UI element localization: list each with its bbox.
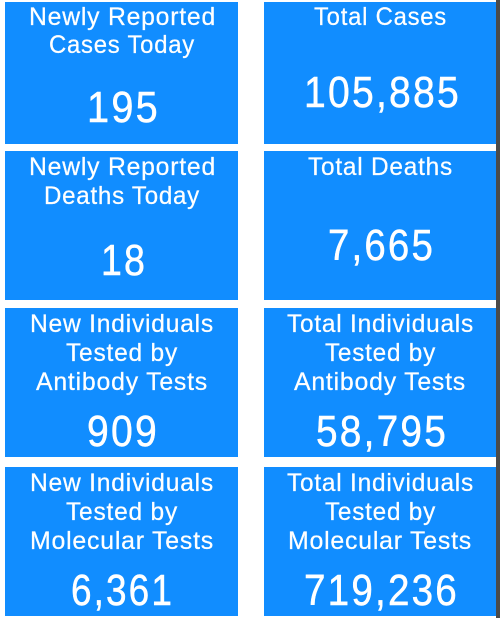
panel: total individuals tested by molecular tests [264,467,496,616]
panel: total deaths: Total Deaths [308,153,453,181]
panel: newly reported cases today: Newly Reported [29,3,216,31]
panel: newly reported cases today: 195 [87,83,160,132]
panel: new individuals tested by antibody tests: Antibody Tests [36,368,208,396]
panel: newly reported deaths today: Newly Reported [29,153,216,181]
panel: total individuals tested by molecular tests: Tested by [325,498,436,526]
panel: total individuals tested by molecular tests: Total Individuals [287,469,474,497]
panel: newly reported cases today [5,2,238,144]
panel: total cases [264,2,496,144]
panel: total cases: 105,885 [304,68,461,117]
panel: total individuals tested by antibody tests [264,308,496,457]
panel: new individuals tested by molecular tests: 6,361 [71,566,174,615]
panel: total individuals tested by antibody tests: Total Individuals [287,310,474,338]
panel: total cases: Total Cases [314,3,447,31]
panel: new individuals tested by antibody tests: 909 [87,407,159,456]
panel: total deaths [264,151,496,300]
panel: new individuals tested by antibody tests: Tested by [66,339,178,367]
panel: new individuals tested by antibody tests [5,308,238,457]
panel: total individuals tested by antibody tests: Tested by [325,339,436,367]
panel: total individuals tested by antibody tests: 58,795 [316,407,448,456]
panel: total individuals tested by molecular tests: 719,236 [304,566,459,615]
panel: total deaths: 7,665 [328,221,435,270]
panel: newly reported cases today: Cases Today [49,31,195,59]
panel: total individuals tested by antibody tests: Antibody Tests [294,368,466,396]
panel: newly reported deaths today [5,151,238,300]
panel: new individuals tested by molecular tests: Molecular Tests [30,527,214,555]
panel: newly reported deaths today: 18 [101,236,147,285]
panel: total individuals tested by molecular tests: Molecular Tests [288,527,472,555]
panel: new individuals tested by molecular tests: New Individuals [30,469,214,497]
panel: newly reported deaths today: Deaths Today [44,182,200,210]
panel: new individuals tested by molecular tests [5,467,238,616]
panel: new individuals tested by molecular tests: Tested by [66,498,178,526]
panel: new individuals tested by antibody tests: New Individuals [30,310,214,338]
